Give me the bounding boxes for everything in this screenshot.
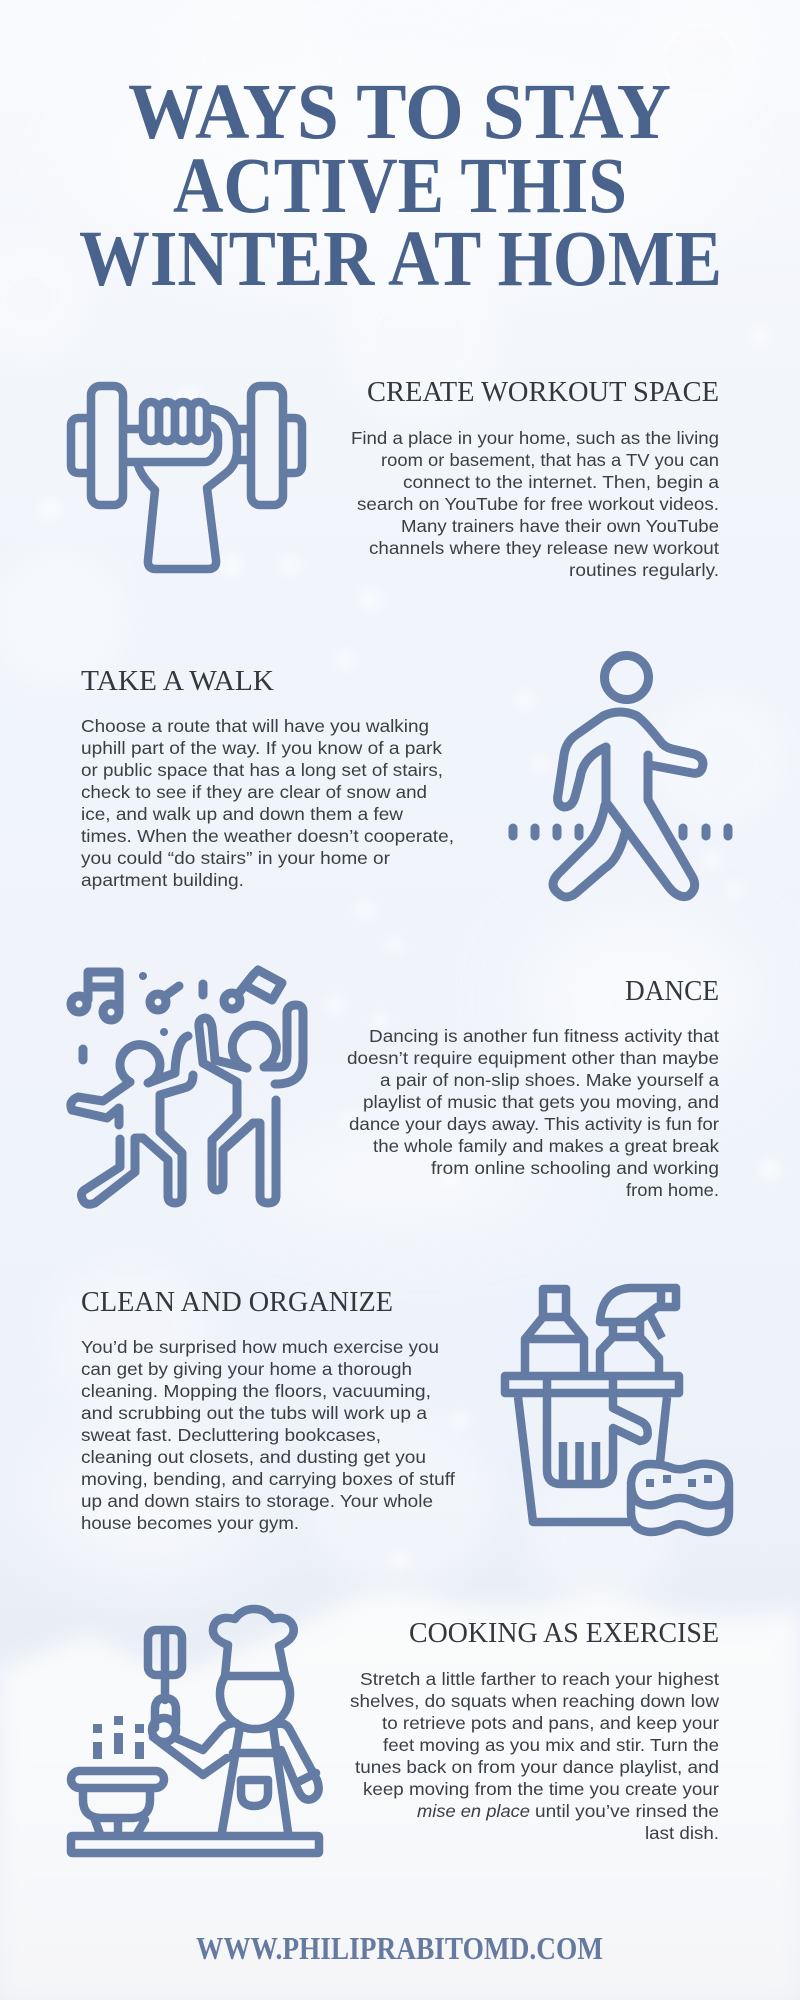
text block: a pair of non-slip shoes. Make yourself a [380, 1070, 719, 1090]
text block: or public space that has a long set of stairs, [81, 760, 443, 780]
text block: keep moving from the time you create your [363, 1779, 719, 1799]
heading: TAKE A WALK [81, 665, 274, 697]
text block: search on YouTube for free workout videos. [357, 494, 719, 514]
text block: cleaning. Mopping the floors, vacuuming, [81, 1381, 431, 1401]
text block: and scrubbing out the tubs will work up a [81, 1403, 427, 1423]
text block: sweat fast. Decluttering bookcases, [81, 1425, 381, 1445]
text block: Find a place in your home, such as the living [351, 428, 719, 448]
text block: to retrieve pots and pans, and keep your [382, 1713, 719, 1733]
heading: COOKING AS EXERCISE [409, 1617, 719, 1649]
text block: Many trainers have their own YouTube [401, 516, 719, 536]
icon: fist lifting dumbbell [71, 386, 302, 569]
text block: doesn’t require equipment other than maybe [347, 1048, 719, 1068]
title [79, 69, 722, 303]
text block: Stretch a little farther to reach your highest [360, 1669, 719, 1689]
text block: times. When the weather doesn’t cooperate, [81, 826, 454, 846]
text block: mise en place [417, 1801, 530, 1821]
text block: up and down stairs to storage. Your whole [81, 1491, 433, 1511]
footer url: WWW.PHILIPRABITOMD.COM [196, 1930, 603, 1966]
text block: can get by giving your home a thorough [81, 1359, 412, 1379]
text block: dance your days away. This activity is fun for [349, 1114, 719, 1134]
text block: connect to the internet. Then, begin a [403, 472, 719, 492]
panel: cooking as exercise [71, 1609, 719, 1853]
text block: the whole family and makes a great break [373, 1136, 719, 1156]
text block: feet moving as you mix and stir. Turn the [383, 1735, 719, 1755]
text block: check to see if they are clear of snow and [81, 782, 427, 802]
text block: Choose a route that will have you walking [81, 716, 429, 736]
text block: channels where they release new workout [369, 538, 719, 558]
text block: house becomes your gym. [81, 1513, 299, 1533]
text block: Dancing is another fun fitness activity that [369, 1026, 719, 1046]
heading: CLEAN AND ORGANIZE [81, 1286, 393, 1318]
text block: from home. [626, 1180, 719, 1200]
text block: tunes back on from your dance playlist, and [355, 1757, 719, 1777]
text block: shelves, do squats when reaching down low [350, 1691, 719, 1711]
title: WAYS TO STAY [128, 69, 671, 156]
title: ACTIVE THIS [173, 143, 627, 230]
title: WINTER AT HOME [79, 216, 722, 303]
icon: walking person [513, 656, 728, 897]
text block: until you’ve rinsed the [535, 1801, 719, 1821]
text block [81, 716, 454, 890]
text block: routines regularly. [569, 560, 719, 580]
heading: DANCE [625, 975, 719, 1007]
panel: dance [71, 970, 719, 1204]
text block: you could “do stairs” in your home or [81, 848, 390, 868]
text block [350, 1669, 719, 1843]
text block: You’d be surprised how much exercise you [81, 1337, 439, 1357]
panel: create workout space [71, 376, 719, 580]
text block: room or basement, that has a TV you can [381, 450, 719, 470]
text block: moving, bending, and carrying boxes of stuff [81, 1469, 455, 1489]
icon: dancers and music notes [71, 970, 303, 1204]
text block [81, 1337, 455, 1533]
text block: apartment building. [81, 870, 244, 890]
panel: take a walk [81, 656, 728, 897]
text block: playlist of music that gets you moving, and [363, 1092, 719, 1112]
panel: clean and organize [81, 1286, 729, 1533]
icon: chef cooking [71, 1609, 319, 1853]
heading: CREATE WORKOUT SPACE [367, 376, 719, 408]
text block: last dish. [645, 1823, 719, 1843]
text block [351, 428, 719, 580]
text block: from online schooling and working [431, 1158, 719, 1178]
text block [347, 1026, 719, 1200]
icon: cleaning bucket [505, 1288, 729, 1532]
text block: cleaning out closets, and dusting get you [81, 1447, 426, 1467]
text block: uphill part of the way. If you know of a park [81, 738, 442, 758]
text block: ice, and walk up and down them a few [81, 804, 403, 824]
